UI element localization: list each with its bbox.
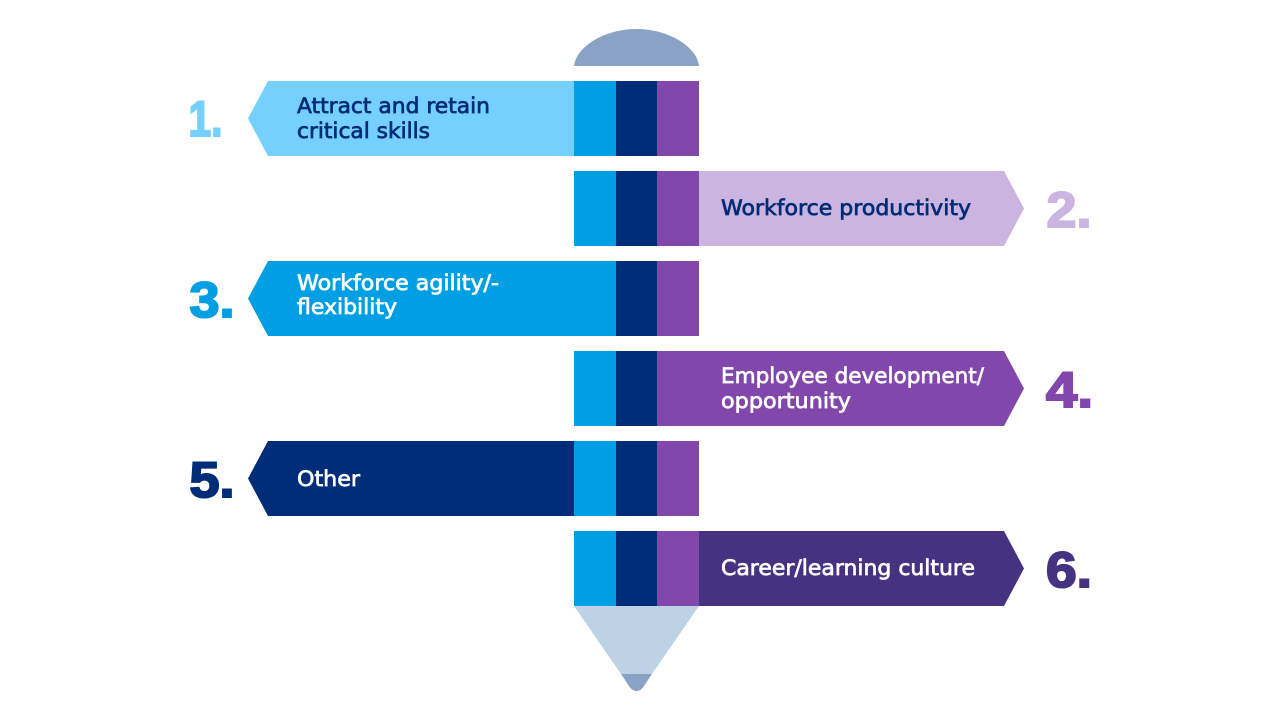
label 4: opportunity — [721, 389, 851, 413]
label 3 — [297, 271, 499, 319]
label 1: Attract and retain — [297, 94, 490, 118]
pencil stripes 1 — [574, 81, 699, 156]
band 1: attract and retain critical skills — [188, 81, 699, 156]
label 5: Other — [297, 467, 360, 491]
number 5: 5. — [190, 452, 234, 508]
label 1: critical skills — [297, 119, 430, 143]
arrow 5 — [248, 441, 574, 516]
pencil stripes 2 — [574, 171, 699, 246]
label 4: Employee development/ — [721, 364, 985, 388]
pencil tip — [574, 606, 699, 691]
arrow 1 — [248, 81, 574, 156]
arrow 6 — [699, 531, 1024, 606]
pencil stripes 6 — [574, 531, 699, 606]
pencil stripes 3 — [616, 261, 699, 336]
number 4: 4. — [1046, 362, 1093, 418]
pencil stripes 4 — [574, 351, 657, 426]
sharpened wood — [574, 606, 699, 674]
label 4 — [721, 364, 985, 413]
arrow 4 — [657, 351, 1024, 426]
band 3: workforce agility/flexibility — [190, 261, 699, 336]
label 6: Career/learning culture — [721, 556, 975, 580]
label 1 — [297, 94, 490, 143]
band 6: career/learning culture — [574, 531, 1092, 606]
label 3: Workforce agility/- — [297, 271, 499, 295]
pencil stripes 5 — [574, 441, 699, 516]
number 1: 1. — [188, 91, 222, 147]
label 3: flexibility — [297, 295, 397, 319]
band 2: workforce productivity — [574, 171, 1092, 246]
arrow 3 — [248, 261, 616, 336]
graphite point — [621, 674, 652, 691]
number 6: 6. — [1046, 542, 1092, 598]
number 2: 2. — [1046, 182, 1092, 238]
arrow 2 — [699, 171, 1024, 246]
number 3: 3. — [190, 272, 234, 328]
band 4: employee development/opportunity — [574, 351, 1093, 426]
label 2: Workforce productivity — [721, 196, 971, 220]
pencil eraser cap — [574, 29, 699, 66]
band 5: other — [190, 441, 699, 516]
